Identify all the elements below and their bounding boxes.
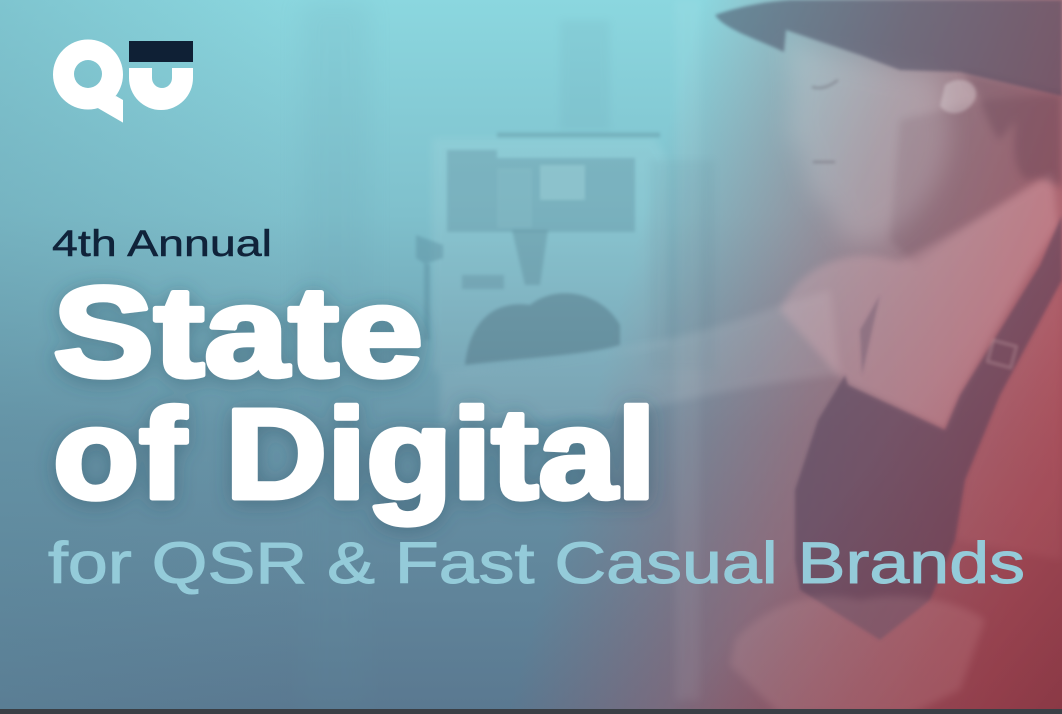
logo: QU [53,40,193,123]
photo: kitchen background and soft-serve machine [300,0,715,714]
title: State of Digital [53,261,656,526]
subtitle: for QSR & Fast Casual Brands [48,531,1025,596]
photo: apron and strap [795,215,1062,640]
photo: hands [730,596,985,714]
title line 2: of Digital [53,383,656,526]
photo: arm reaching toward the machine [440,290,840,425]
bottom edge strip [0,709,1062,714]
logo letter U [129,68,193,110]
photo: hair [962,72,1062,185]
photo: neck shadow and hair [890,95,1062,265]
logo letter Q [53,40,123,123]
eyebrow: 4th Annual: 4th Annual [52,223,272,264]
logo dark bar [129,41,193,62]
title line 1: State [53,261,423,404]
photo: woman's shirt [780,172,1058,430]
photo: ear [940,80,976,113]
photo: cap [715,0,1062,96]
photo: woman's face and neck [785,40,950,243]
